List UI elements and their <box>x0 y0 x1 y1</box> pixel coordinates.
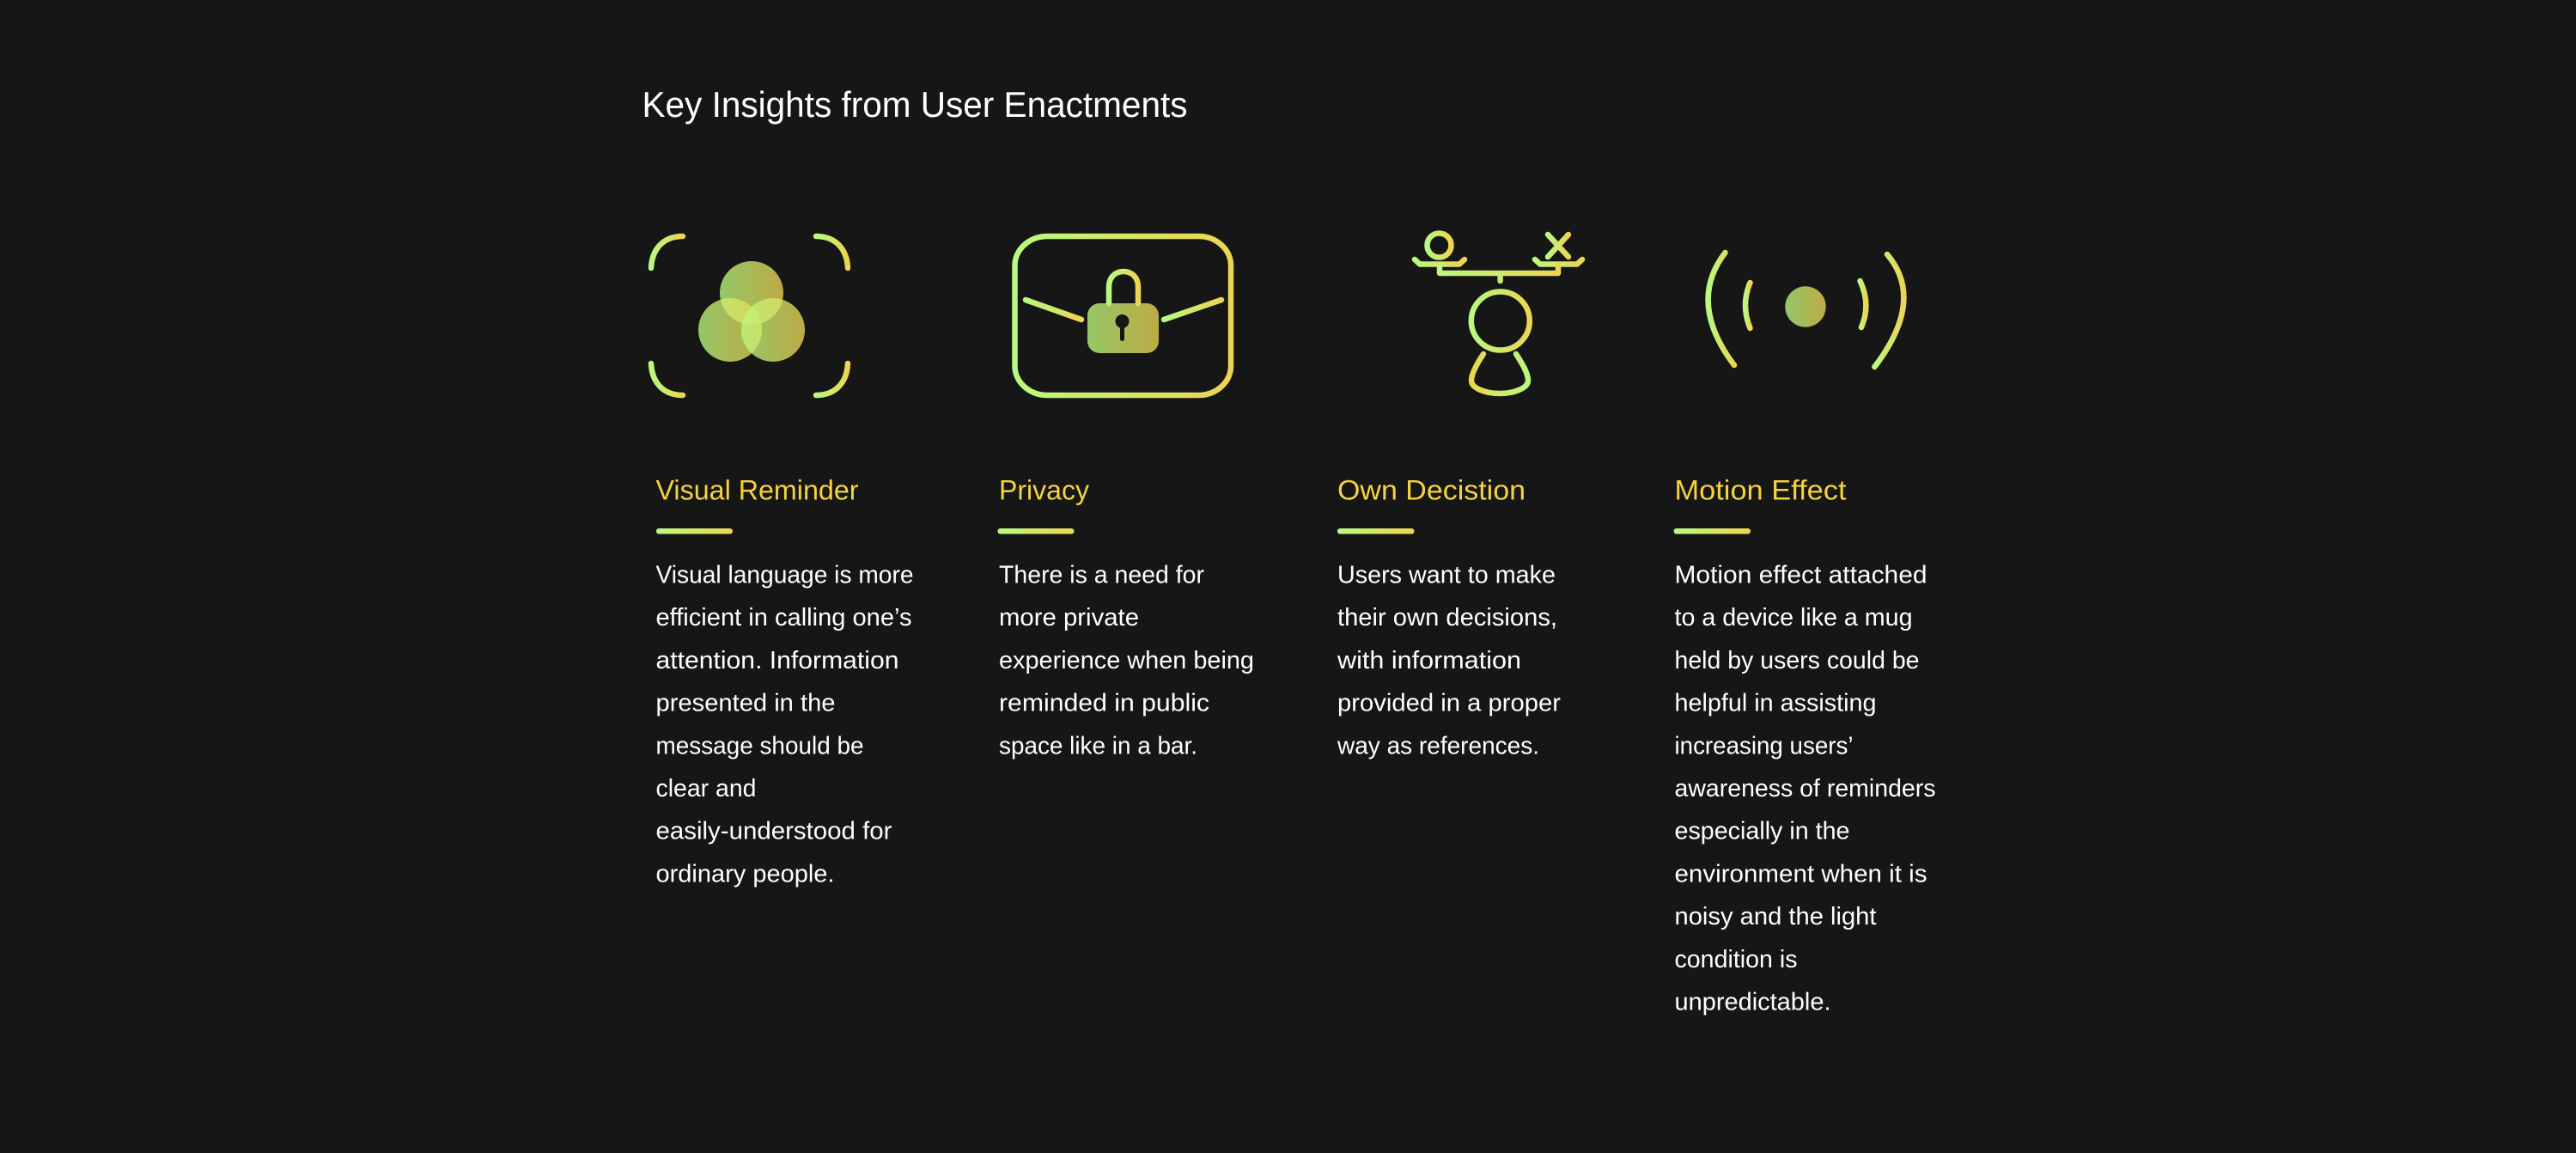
underline <box>998 528 1074 534</box>
body text: increasing users’ <box>1675 732 1854 760</box>
underline <box>1674 528 1751 534</box>
body text <box>1337 562 1561 760</box>
body text: reminded in public <box>999 690 1209 717</box>
body text <box>656 562 914 888</box>
body text: to a device like a mug <box>1675 604 1912 631</box>
panel: visual reminder <box>651 236 914 888</box>
body text: There is a need for <box>999 562 1204 589</box>
title: Key Insights from User Enactments <box>642 84 1187 125</box>
body text: Users want to make <box>1337 562 1556 589</box>
body text: Motion effect attached <box>1675 562 1927 589</box>
heading: visual reminder: Visual Reminder <box>656 474 859 505</box>
body text: especially in the <box>1675 818 1850 845</box>
body text: environment when it is <box>1675 860 1927 888</box>
body text: more private <box>999 604 1139 631</box>
underline <box>656 528 733 534</box>
body text: message should be <box>656 732 864 760</box>
icon: person balancing choices <box>1415 234 1582 393</box>
body text: attention. Information <box>656 647 898 674</box>
body text: with information <box>1337 647 1521 674</box>
icon: vibrating dot <box>1708 253 1903 367</box>
body text: way as references. <box>1337 732 1539 760</box>
body text: clear and <box>656 775 756 802</box>
body text: efficient in calling one’s <box>656 604 912 631</box>
panel: own decision <box>1337 234 1582 760</box>
body text: easily-understood for <box>656 818 892 845</box>
body text: ordinary people. <box>656 860 835 888</box>
panel: privacy <box>998 236 1254 760</box>
heading: privacy: Privacy <box>999 474 1089 505</box>
body text <box>1675 562 1936 1016</box>
body text: noisy and the light <box>1675 903 1876 930</box>
body text: helpful in assisting <box>1675 690 1876 717</box>
body text: provided in a proper <box>1337 690 1561 717</box>
body text: held by users could be <box>1675 647 1919 674</box>
heading: own decistion: Own Decistion <box>1337 474 1526 505</box>
body text: awareness of reminders <box>1675 775 1936 802</box>
body text: space like in a bar. <box>999 732 1197 760</box>
icon: overlapping circles in viewfinder <box>651 236 848 395</box>
body text: Visual language is more <box>656 562 914 589</box>
icon: envelope with padlock <box>1015 236 1231 395</box>
body text: presented in the <box>656 690 835 717</box>
body text: their own decisions, <box>1337 604 1557 631</box>
heading: motion effect: Motion Effect <box>1675 474 1847 505</box>
body text: unpredictable. <box>1675 988 1831 1016</box>
underline <box>1337 528 1414 534</box>
body text <box>999 562 1254 760</box>
body text: experience when being <box>999 647 1254 674</box>
body text: condition is <box>1675 946 1797 973</box>
panel: motion effect <box>1674 253 1936 1016</box>
